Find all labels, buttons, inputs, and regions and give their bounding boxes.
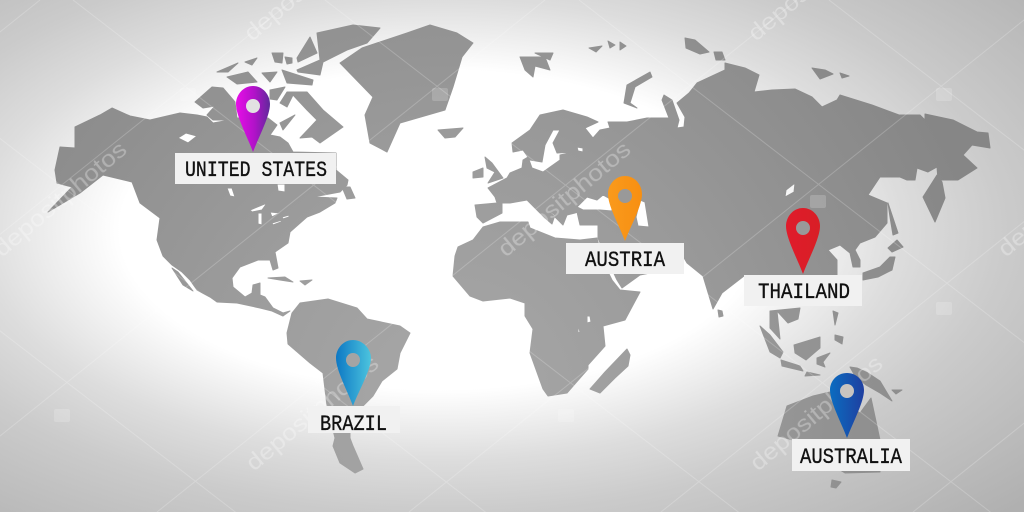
Baja California: [172, 268, 193, 291]
label: United States: [175, 153, 336, 184]
watermark camera icons: [54, 88, 952, 422]
location: Brazil: [308, 340, 400, 437]
Japan: [863, 240, 903, 280]
location: Thailand: [744, 208, 862, 306]
pin: orange: [608, 176, 642, 241]
watermark text: depositphotos: [493, 136, 636, 262]
Sri Lanka: [718, 310, 723, 317]
location: Austria: [566, 176, 684, 274]
label: Australia: AUSTRALIA: [800, 445, 903, 470]
location: Australia: [792, 373, 910, 471]
Iceland: [438, 128, 463, 138]
Madagascar: [590, 349, 630, 393]
continent: Australia: [778, 392, 880, 473]
Arctic islands of Eurasia: [520, 38, 849, 108]
continent: North America: [48, 108, 348, 316]
Canadian Arctic islands: [195, 25, 380, 199]
watermark text: depositphotos: [745, 350, 888, 476]
Caribbean islands: [268, 277, 312, 285]
pin: dark blue: [830, 373, 864, 438]
Kamchatka: [923, 175, 945, 222]
continent: Africa: [453, 222, 640, 396]
continent: Eurasia: [475, 63, 990, 309]
pin: light blue: [336, 340, 371, 406]
pin: red: [786, 208, 820, 274]
pin: purple: [236, 86, 270, 152]
Southeast Asia: [770, 308, 800, 339]
label: Brazil: BRAZIL: [320, 412, 387, 437]
location: United States: [175, 86, 336, 184]
label: United States: UNITED STATES: [185, 158, 327, 183]
Indonesia and Philippines: [760, 311, 843, 376]
Greenland: [340, 25, 473, 152]
watermark text: depositphotos: [241, 350, 384, 476]
label: Thailand: THAILAND: [758, 280, 850, 305]
New Guinea: [850, 367, 902, 401]
continent: South America: [287, 299, 410, 473]
label: Austria: AUSTRIA: [585, 248, 666, 273]
British Isles: [473, 157, 503, 183]
Sakhalin: [888, 203, 898, 235]
Tasmania: [831, 480, 841, 488]
